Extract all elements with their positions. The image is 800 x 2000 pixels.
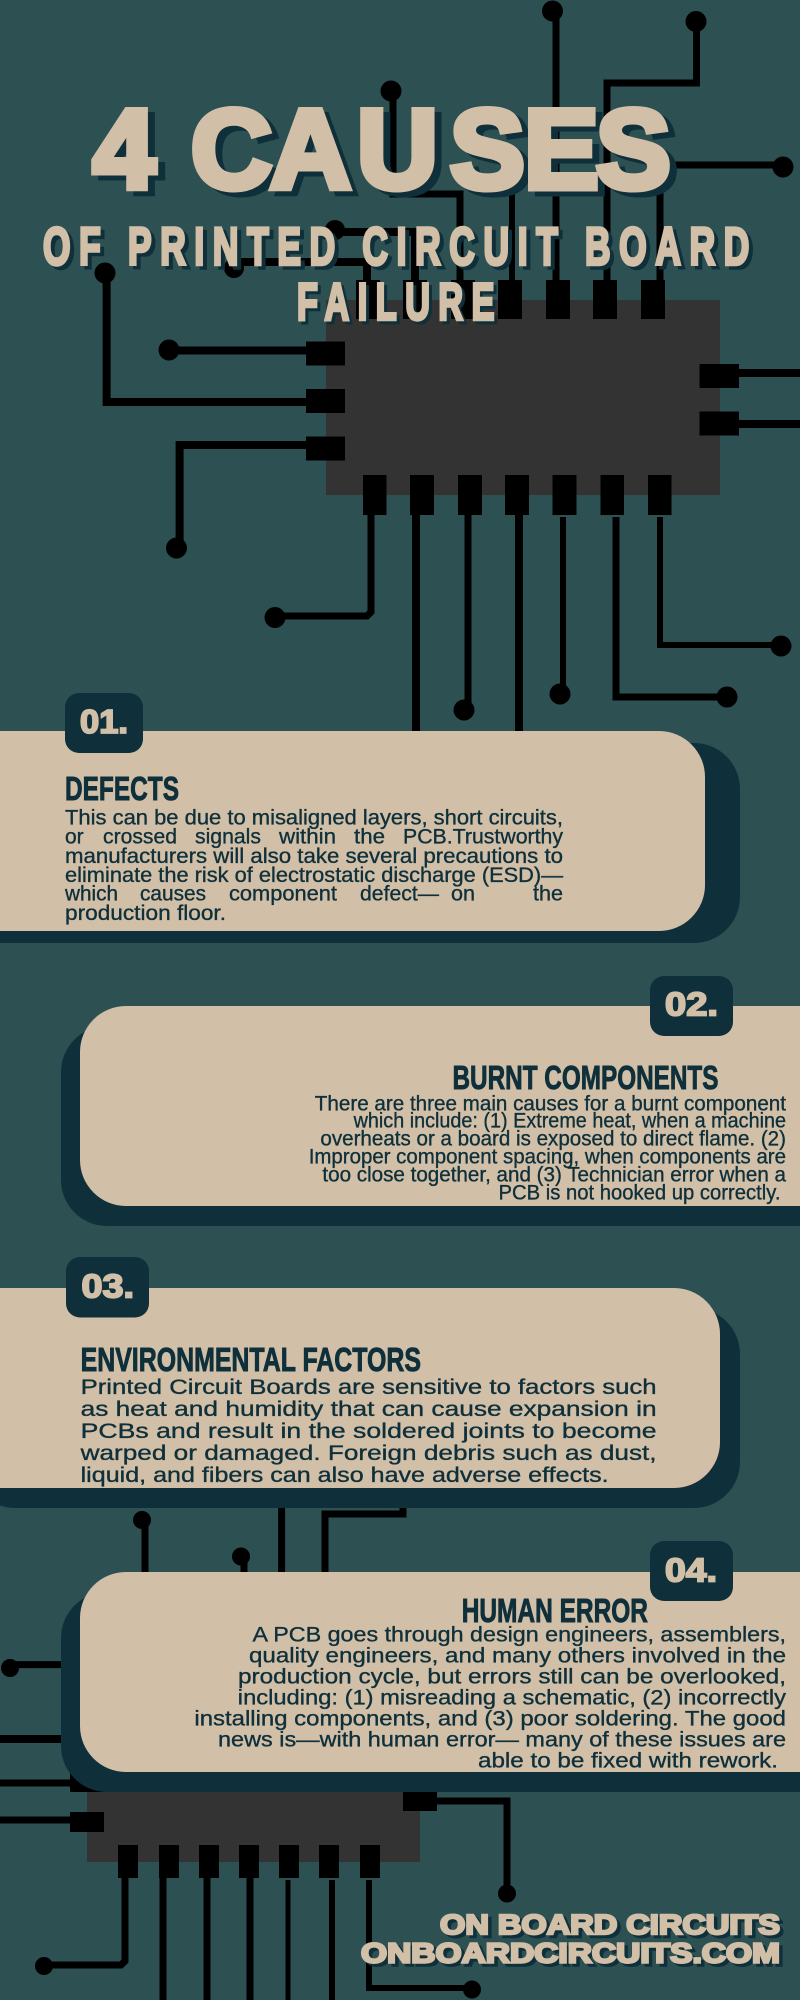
panel: 02 burnt components xyxy=(61,976,800,1226)
panel card xyxy=(80,1006,800,1206)
number badge xyxy=(65,693,143,753)
heading: DEFECTS xyxy=(65,770,179,807)
subtitle: failure: FAILURE xyxy=(297,274,503,332)
chip body top xyxy=(326,300,720,495)
body text: defect— xyxy=(360,883,439,906)
body text: PCBs and result in the soldered joints to become xyxy=(81,1420,657,1443)
body text: installing components, and (3) poor soldering. The good xyxy=(194,1708,786,1731)
body text: signals xyxy=(195,826,261,849)
company name: ON BOARD CIRCUITS xyxy=(444,1912,784,1943)
circuit traces bottom xyxy=(0,1500,507,2000)
body text: able to be fixed with rework. xyxy=(478,1749,778,1772)
body text: liquid, and fibers can also have adverse effects. xyxy=(81,1464,609,1487)
number: 01. xyxy=(80,703,128,740)
body text: A PCB goes through design engineers, assemblers, xyxy=(252,1623,786,1646)
body text: Printed Circuit Boards are sensitive to factors such xyxy=(81,1376,657,1399)
title line: 4 causes: 4 CAUSES xyxy=(100,92,678,217)
body text: as heat and humidity that can cause expansion in xyxy=(81,1398,657,1421)
trace end dots bottom xyxy=(1,1511,516,1998)
body text: overheats or a board is exposed to direct flame. (2) xyxy=(320,1128,786,1150)
subtitle: failure: FAILURE xyxy=(300,276,506,334)
body text: quality engineers, and many others involved in the xyxy=(249,1644,786,1667)
body text: news is—with human error— many of these issues are xyxy=(218,1729,786,1752)
body text: crossed xyxy=(103,826,177,849)
chip pins bottom xyxy=(70,1770,437,1878)
number badge xyxy=(66,1257,149,1318)
body text: which xyxy=(64,883,118,906)
circuit traces top xyxy=(107,11,800,735)
body text: causes xyxy=(140,883,206,906)
panel shadow xyxy=(61,1026,800,1226)
number badge xyxy=(650,1541,733,1601)
panel shadow xyxy=(61,1592,800,1792)
panel shadow xyxy=(0,1308,740,1508)
number: 04. xyxy=(665,1552,717,1588)
chip pins top xyxy=(306,280,739,515)
number: 02. xyxy=(665,986,718,1022)
panel: 01 defects xyxy=(0,693,740,943)
panel shadow xyxy=(0,743,740,943)
body text: This can be due to misaligned layers, short circuits, xyxy=(65,807,563,830)
bottom circuit chip xyxy=(0,1500,516,2000)
body text: manufacturers will also take several precautions to xyxy=(65,845,563,868)
body text: PCB.Trustworthy xyxy=(403,826,564,849)
panel: 04 human error xyxy=(61,1541,800,1792)
body text: which include: (1) Extreme heat, when a machine xyxy=(353,1110,786,1132)
body text: component xyxy=(229,883,337,906)
website url: ONBOARDCIRCUITS.COM xyxy=(364,1940,784,1972)
heading: ENVIRONMENTAL FACTORS xyxy=(81,1341,421,1378)
chip body bottom xyxy=(87,1700,420,1862)
title line: 4 causes: 4 CAUSES xyxy=(93,87,671,212)
panel card xyxy=(0,1288,720,1488)
body text: Improper component spacing, when components are xyxy=(309,1146,786,1168)
body text: the xyxy=(354,826,385,849)
website url: ONBOARDCIRCUITS.COM xyxy=(361,1938,780,1968)
subtitle: failure xyxy=(297,274,506,334)
heading: HUMAN ERROR xyxy=(462,1592,648,1629)
body text xyxy=(194,1623,787,1772)
body text: within xyxy=(278,826,336,849)
top circuit chip xyxy=(94,0,800,735)
body text: too close together, and (3) Technician error when a xyxy=(322,1163,786,1186)
body text: or xyxy=(65,826,84,849)
panel: 03 environmental factors xyxy=(0,1257,740,1508)
body text: There are three main causes for a burnt component xyxy=(315,1092,786,1115)
body text: on xyxy=(451,883,475,906)
body text: including: (1) misreading a schematic, (2) incorrectly xyxy=(238,1686,787,1709)
number: 03. xyxy=(82,1268,134,1304)
number badge xyxy=(650,976,733,1036)
body text: the xyxy=(533,883,563,906)
panel card xyxy=(80,1572,800,1772)
body text: warped or damaged. Foreign debris such as dust, xyxy=(79,1442,657,1465)
body text xyxy=(64,807,564,925)
body text xyxy=(309,1092,786,1204)
footer: company name and url xyxy=(361,1909,784,1972)
body text: production floor. xyxy=(65,902,226,925)
body text xyxy=(79,1376,657,1487)
body text: production cycle, but errors still can be overlooked, xyxy=(238,1666,786,1688)
body text: eliminate the risk of electrostatic discharge (ESD)— xyxy=(65,864,563,887)
panel card xyxy=(0,731,705,931)
company name: ON BOARD CIRCUITS xyxy=(440,1909,780,1940)
title xyxy=(43,87,762,334)
body text: PCB is not hooked up correctly. xyxy=(498,1181,780,1204)
trace end dots top xyxy=(94,0,794,720)
